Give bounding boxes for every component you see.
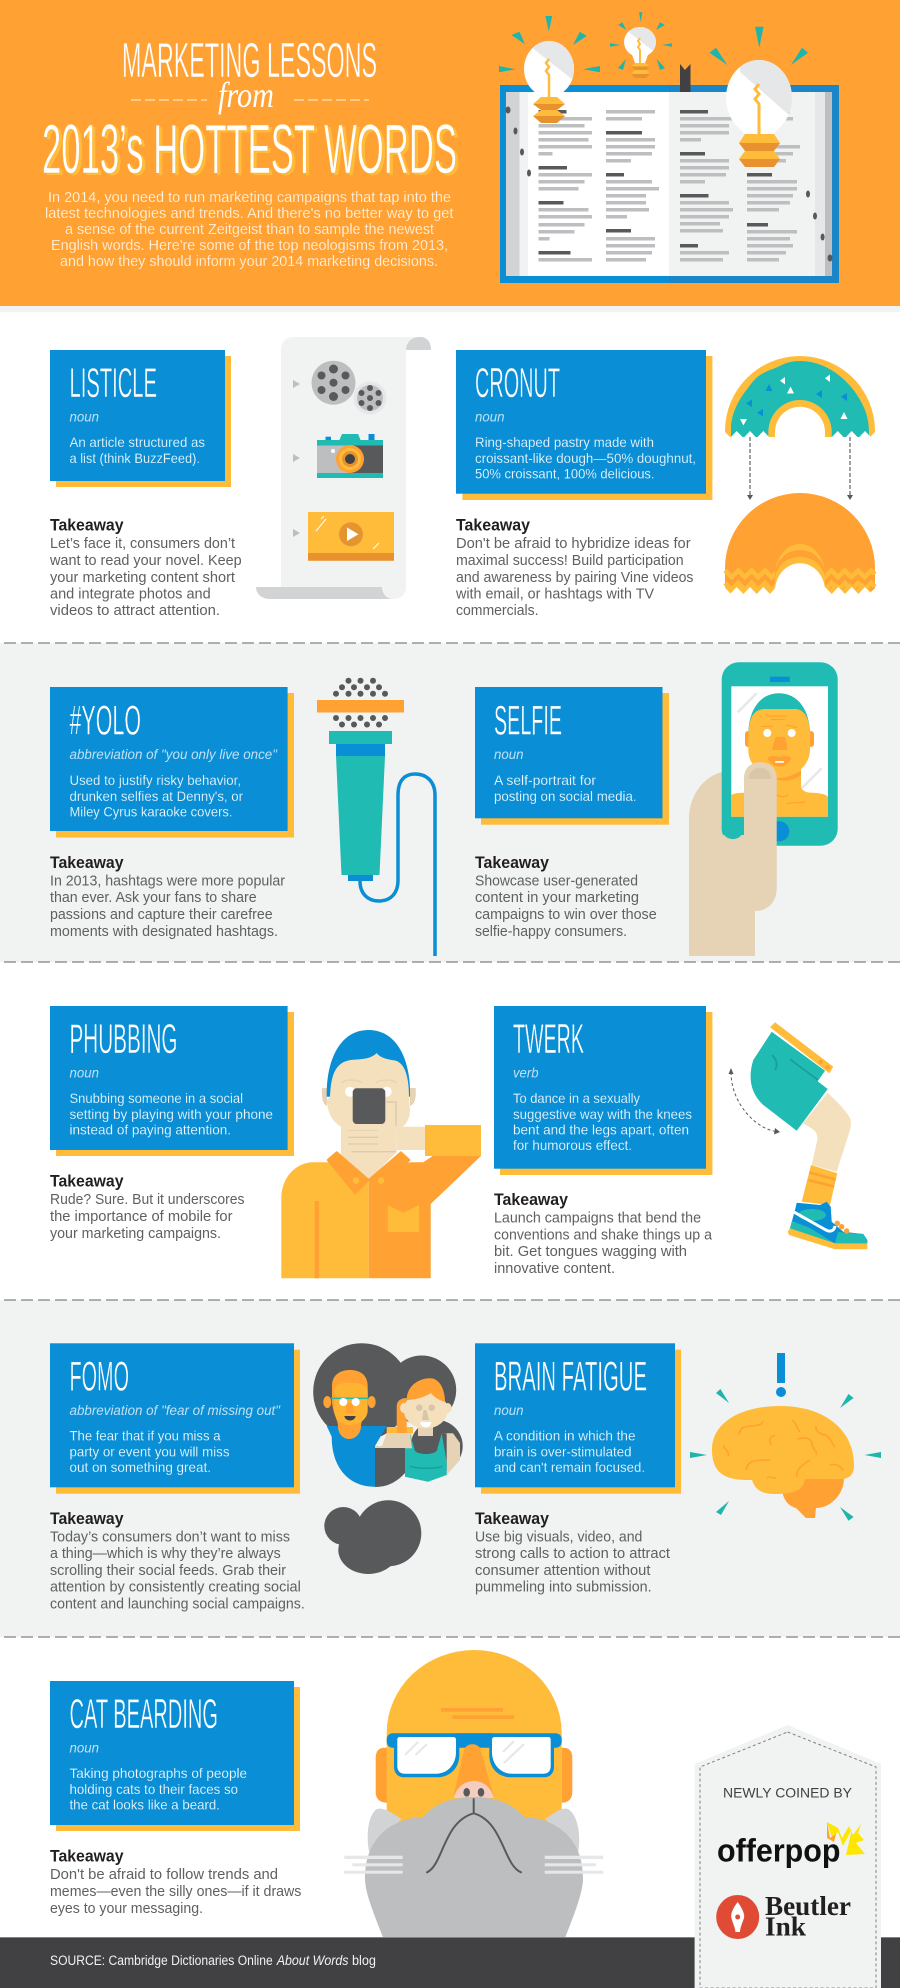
source line: About Words	[276, 1953, 349, 1968]
takeaway text	[475, 853, 657, 940]
intro paragraph	[45, 189, 454, 270]
definition card: verb	[513, 1066, 539, 1080]
definition card: CAT BEARDING	[70, 1690, 218, 1737]
takeaway text: content and launching social campaigns.	[50, 1597, 305, 1613]
exclamation mark	[776, 1353, 786, 1397]
intro paragraph: a sense of the current Zeitgeist than to sample the newest	[65, 221, 435, 238]
definition card: noun	[494, 1403, 524, 1418]
definition card: abbreviation of "you only live once"	[70, 747, 278, 762]
takeaway text: attention by consistently creating social	[50, 1580, 301, 1596]
definition card: Ring-shaped pastry made with	[475, 434, 654, 450]
definition card	[50, 1006, 294, 1156]
illustration: croissant bottom	[724, 493, 876, 595]
badge heading: NEWLY COINED BY	[723, 1786, 852, 1801]
takeaway text: Takeaway	[50, 1172, 124, 1191]
badge: newly coined by	[695, 1725, 881, 1988]
takeaway text: the importance of mobile for	[50, 1209, 233, 1225]
definition card: drunken selfies at Denny's, or	[70, 788, 243, 804]
takeaway text	[50, 1847, 301, 1917]
collar	[328, 1152, 369, 1193]
definition card: Miley Cyrus karaoke covers.	[70, 804, 232, 820]
panel: brain fatigue	[475, 1343, 881, 1596]
definition card: 50% croissant, 100% delicious.	[475, 466, 654, 482]
footer bar	[0, 1937, 900, 1988]
definition card: abbreviation of "fear of missing out"	[70, 1403, 281, 1418]
takeaway text: your marketing content short	[50, 570, 235, 586]
takeaway text: Don't be afraid to follow trends and	[50, 1867, 278, 1883]
takeaway text	[49, 516, 242, 619]
definition card	[475, 1343, 681, 1494]
takeaway text	[50, 1172, 244, 1242]
definition card: SELFIE	[494, 697, 562, 744]
neck	[341, 1125, 397, 1180]
shorts	[751, 1032, 828, 1131]
illustration: open book with light bulbs	[499, 12, 839, 283]
takeaway text	[50, 1509, 305, 1613]
takeaway text: eyes to your messaging.	[50, 1901, 203, 1917]
takeaway text: and awareness by pairing Vine videos	[456, 570, 694, 586]
definition card: brain is over-stimulated	[494, 1443, 632, 1459]
header panel: 2013’s HOTTEST WORDS	[42, 110, 457, 188]
head	[322, 1088, 327, 1106]
definition card: setting by playing with your phone	[70, 1106, 273, 1122]
illustration: brain with exclamation	[690, 1353, 881, 1521]
takeaway text: videos to attract attention.	[50, 603, 220, 619]
page text bars	[538, 110, 800, 262]
takeaway text: Takeaway	[456, 516, 531, 535]
speech blob	[324, 1500, 421, 1574]
icon: camera	[317, 434, 383, 478]
takeaway text	[50, 853, 285, 940]
shoe	[788, 1228, 867, 1249]
takeaway text: Takeaway	[50, 1509, 124, 1528]
page edge tabs	[506, 106, 832, 262]
woman	[442, 1433, 460, 1475]
logo: offerpop: offerpop	[717, 1833, 840, 1869]
definition card: An article structured as	[70, 434, 205, 450]
takeaway text: campaigns to win over those	[475, 907, 657, 923]
takeaway text: moments with designated hashtags.	[50, 924, 278, 940]
takeaway text: scrolling their social feeds. Grab their	[50, 1563, 286, 1579]
icon: left bulb	[499, 16, 600, 123]
takeaway text: Today’s consumers don’t want to miss	[50, 1529, 290, 1545]
definition card	[50, 350, 231, 487]
source line: blog	[352, 1953, 376, 1968]
definition card: instead of paying attention.	[70, 1122, 231, 1138]
definition card: out on something great.	[70, 1459, 211, 1475]
takeaway text: consumer attention without	[475, 1563, 650, 1579]
intro paragraph: and how they should inform your 2014 marketing decisions.	[60, 253, 438, 270]
takeaway text: and integrate photos and	[50, 587, 211, 603]
definition card: TWERK	[513, 1015, 584, 1062]
logo: beutler ink: Ink	[765, 1912, 806, 1942]
takeaway text: Takeaway	[475, 1509, 550, 1528]
selfie portrait	[731, 693, 828, 817]
takeaway text: Takeaway	[50, 853, 124, 872]
takeaway text: memes—even the silly ones—if it draws	[50, 1884, 301, 1900]
definition card: party or event you will miss	[70, 1443, 230, 1459]
definition card	[50, 1343, 300, 1494]
definition card: noun	[70, 1740, 99, 1756]
shirt	[281, 1162, 369, 1278]
definition card: PHUBBING	[70, 1015, 178, 1062]
illustration: man with cat beard	[344, 1650, 603, 1938]
panel: twerk	[494, 1006, 867, 1277]
definition card: CRONUT	[475, 359, 560, 406]
intro paragraph: In 2014, you need to run marketing campaigns that tap into the	[48, 189, 451, 206]
takeaway text: bit. Get tongues wagging with	[494, 1244, 687, 1260]
definition card: noun	[70, 410, 99, 424]
intro paragraph: English words. Here're some of the top neologisms from 2013,	[51, 237, 448, 254]
definition card: croissant-like dough—50% doughnut,	[475, 450, 696, 466]
arrow: dashed curve	[728, 1068, 780, 1134]
panel: listicle	[49, 337, 431, 619]
definition card: A self-portrait for	[494, 772, 596, 788]
takeaway text: content in your marketing	[475, 890, 639, 906]
definition card: #YOLO	[70, 697, 141, 744]
source line: SOURCE: Cambridge Dictionaries Online	[50, 1953, 273, 1968]
definition card: bent and the legs apart, often	[513, 1122, 689, 1138]
icon: large bulb	[710, 27, 810, 167]
logo: offerpop	[717, 1822, 865, 1869]
panel: phubbing	[50, 1006, 481, 1278]
panel: selfie	[475, 662, 838, 956]
icon: film reels	[312, 361, 386, 414]
whiskers	[344, 1856, 603, 1874]
definition card: holding cats to their faces so	[70, 1781, 238, 1797]
takeaway text: pummeling into submission.	[475, 1580, 652, 1596]
takeaway text: maximal success! Build participation	[456, 553, 684, 569]
illustration: twerking leg	[728, 1022, 867, 1249]
takeaway text: commercials.	[456, 603, 538, 619]
takeaway text: Rude? Sure. But it underscores	[50, 1192, 244, 1208]
takeaway text: strong calls to action to attract	[475, 1546, 670, 1562]
header panel	[0, 0, 900, 306]
panel: yolo	[50, 678, 435, 956]
takeaway text: than ever. Ask your fans to share	[50, 890, 257, 906]
intro paragraph: latest technologies and trends. And there's no better way to get	[45, 205, 454, 222]
definition card	[475, 687, 669, 825]
arm and sleeve	[397, 1127, 427, 1150]
panel: cat bearding	[50, 1650, 603, 1938]
takeaway text: Don't be afraid to hybridize ideas for	[456, 536, 691, 552]
nose	[453, 1744, 494, 1797]
cat ears	[368, 1809, 402, 1852]
takeaway text: passions and capture their carefree	[50, 907, 273, 923]
definition card: for humorous effect.	[513, 1137, 632, 1153]
definition card: and can't remain focused.	[494, 1459, 645, 1475]
illustration: scroll with media	[256, 337, 431, 599]
man	[327, 1426, 387, 1487]
definition card	[50, 1681, 300, 1831]
icon: small bulb	[610, 12, 672, 78]
definition card: noun	[70, 1066, 99, 1080]
definition card	[456, 350, 712, 500]
logo: beutler ink: Beutler	[765, 1891, 851, 1921]
definition card	[50, 687, 294, 838]
takeaway text	[455, 516, 694, 619]
takeaway text: Takeaway	[494, 1190, 569, 1209]
header panel: 2013’s HOTTEST WORDS	[45, 112, 460, 190]
takeaway text: Use big visuals, video, and	[475, 1529, 642, 1545]
definition card: noun	[494, 747, 524, 762]
takeaway text: Takeaway	[50, 1847, 124, 1866]
cat nose	[454, 1781, 494, 1798]
takeaway text	[494, 1190, 713, 1277]
illustration: doughnut top	[724, 356, 876, 439]
icon: video player	[308, 512, 394, 561]
takeaway text: Takeaway	[475, 853, 550, 872]
illustration: microphone	[317, 678, 435, 956]
definition card: BRAIN FATIGUE	[494, 1352, 647, 1399]
panel: fomo	[50, 1343, 463, 1613]
glasses	[387, 1733, 562, 1777]
takeaway text: selfie-happy consumers.	[475, 924, 627, 940]
definition card: A condition in which the	[494, 1427, 636, 1443]
doughnut torn edge	[724, 431, 876, 438]
definition card: The fear that if you miss a	[70, 1427, 221, 1443]
illustration: hand holding phone	[689, 662, 838, 956]
title: from: from	[218, 75, 274, 115]
takeaway text: Showcase user-generated	[475, 873, 638, 889]
takeaway text: want to read your novel. Keep	[49, 553, 242, 569]
definition card	[494, 1006, 712, 1175]
bookmark	[680, 64, 690, 92]
takeaway text	[475, 1509, 670, 1596]
logo: beutler ink	[716, 1891, 851, 1942]
thumb	[744, 762, 777, 911]
header panel: MARKETING LESSONS	[122, 34, 377, 88]
definition card: posting on social media.	[494, 788, 637, 804]
definition card: a list (think BuzzFeed).	[70, 450, 200, 466]
takeaway text: Launch campaigns that bend the	[494, 1211, 701, 1227]
definition card: Snubbing someone in a social	[70, 1090, 243, 1106]
definition card: Used to justify risky behavior,	[70, 772, 241, 788]
definition card: suggestive way with the knees	[513, 1106, 692, 1122]
arrows: dashed drop arrows	[747, 437, 853, 500]
illustration: two people on phone	[313, 1343, 463, 1574]
takeaway text: with email, or hashtags with TV	[455, 587, 654, 603]
phone	[353, 1088, 385, 1124]
takeaway text: Let’s face it, consumers don’t	[50, 536, 235, 552]
takeaway text: Takeaway	[50, 516, 124, 535]
lower fingers over phone	[715, 835, 744, 847]
takeaway text: a thing—which is why they’re always	[50, 1546, 281, 1562]
takeaway text: conventions and shake things up a	[494, 1228, 713, 1244]
cat mouth	[427, 1799, 521, 1872]
definition card: noun	[475, 410, 504, 424]
illustration: man looking at phone	[281, 1030, 481, 1278]
takeaway text: In 2013, hashtags were more popular	[50, 873, 285, 889]
takeaway text: your marketing campaigns.	[50, 1226, 221, 1242]
definition card: FOMO	[70, 1352, 129, 1399]
mic cord	[360, 774, 435, 956]
title: 2013's hottest words	[42, 110, 460, 190]
definition card: the cat looks like a beard.	[70, 1796, 220, 1812]
cat body	[365, 1797, 583, 1938]
panel: cronut	[455, 350, 876, 619]
croissant torn edge	[724, 587, 876, 594]
definition card: To dance in a sexually	[513, 1090, 640, 1106]
definition card: Taking photographs of people	[70, 1765, 247, 1781]
takeaway text: innovative content.	[494, 1261, 615, 1277]
definition card: LISTICLE	[70, 359, 157, 406]
